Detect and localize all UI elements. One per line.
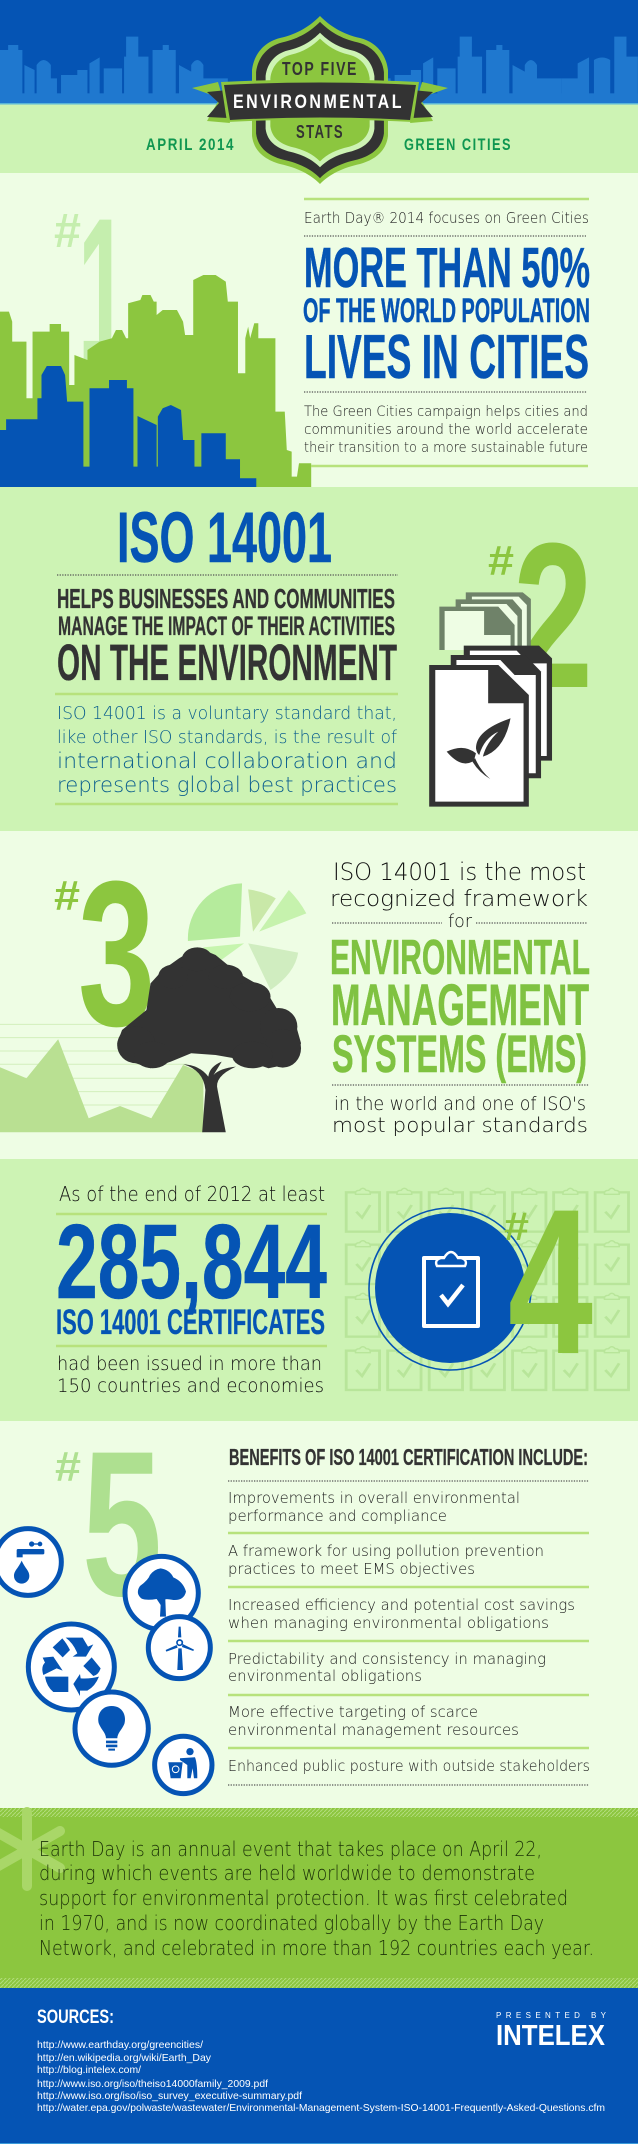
countries text: 150 countries and economies [57,1376,324,1397]
countries text: had been issued in more than [57,1354,322,1375]
panel: stat 4 [0,1159,638,1421]
icon: wind turbine [148,1617,210,1679]
benefits list: environmental obligations [228,1667,422,1685]
framework text: ISO 14001 is the most [333,858,586,886]
badge text: environmental: ENVIRONMENTAL [233,92,404,113]
date label: APRIL 2014 [146,135,235,154]
number 3 [54,838,155,1069]
earth day paragraph: during which events are held worldwide to demonstrate [39,1861,535,1885]
number 2 [488,500,593,731]
subheading: HELPS BUSINESSES AND COMMUNITIES [57,583,395,614]
iso paragraph [57,703,398,797]
subheading [57,583,397,691]
city skyline illustration [0,275,311,487]
framework text: for [448,911,473,932]
number 5: # [55,1443,81,1490]
number 3: # [54,872,80,919]
benefits list: practices to meet EMS objectives [228,1560,475,1578]
theme label: GREEN CITIES [404,135,512,154]
number 2: # [488,537,514,584]
iso paragraph: international collaboration and [57,749,397,773]
source list: http://www.iso.org/iso/theiso14000family_2009.pdf [37,2078,268,2090]
benefits list: when managing environmental obligations [228,1614,549,1632]
benefits list: Increased efficiency and potential cost savings [228,1596,575,1614]
benefits list: More effective targeting of scarce [228,1703,478,1721]
icon: person using bin [155,1736,212,1794]
benefits list: environmental management resources [228,1721,519,1739]
panel: stat 3 [0,831,638,1158]
icon: recycle [28,1624,114,1710]
earth day paragraph: support for environmental protection. It was first celebrated [39,1886,568,1910]
iso heading: ISO 14001 [117,499,332,578]
icon: tree [125,1556,198,1630]
icon: light bulb [75,1692,148,1765]
panel: earth day note [0,1808,638,1988]
icon: water tap [0,1529,61,1595]
number 1 [54,175,128,406]
chart lines and mountains [0,1024,203,1132]
earth day paragraph: Earth Day is an annual event that takes place on April 22, [39,1837,542,1861]
pie chart [188,883,306,990]
panel: stat 1: 1 [78,175,128,406]
earth day paragraph [39,1837,594,1960]
benefits list [228,1489,590,1775]
number 4: 4 [508,1166,593,1397]
benefits list: performance and compliance [228,1507,447,1525]
countries text [57,1354,324,1397]
campaign paragraph: The Green Cities campaign helps cities and [304,404,588,420]
source list: http://www.earthday.org/greencities/ [37,2039,203,2051]
certificates label: ISO 14001 CERTIFICATES [56,1303,325,1342]
popularity text: in the world and one of ISO's [334,1093,586,1115]
benefits list: Enhanced public posture with outside stakeholders [228,1757,590,1775]
framework text [330,858,588,932]
popularity text: most popular standards [332,1113,588,1137]
icon: stacked documents with leaf [429,592,552,807]
campaign paragraph [304,404,588,456]
subheading: ON THE ENVIRONMENT [57,634,397,691]
number 5 [55,1408,162,1639]
framework text: recognized framework [330,887,588,912]
earth day paragraph: in 1970, and is now coordinated globally by the Earth Day [39,1911,544,1935]
badge [192,16,448,184]
badge text: stats: STATS [296,122,344,142]
panel: stat 1 [0,173,638,487]
top rule [304,198,589,200]
source list: http://en.wikipedia.org/wiki/Earth_Day [37,2052,212,2064]
subheading: MANAGE THE IMPACT OF THEIR ACTIVITIES [58,611,395,641]
panel: footer sources [0,1988,638,2144]
icon: clipboard in circle [369,1208,531,1370]
iso paragraph: ISO 14001 is a voluntary standard that, [57,703,397,724]
shield [252,16,388,184]
presenter logo: INTELEX [496,2020,606,2052]
benefits list: A framework for using pollution prevention [228,1542,544,1560]
benefits list: Predictability and consistency in managing [228,1650,546,1668]
panel: stat 5 [0,1408,638,1808]
iso paragraph: like other ISO standards, is the result of [57,727,398,748]
certificate text: As of the end of 2012 at least [59,1182,325,1206]
source list: http://www.iso.org/iso/iso_survey_executive-summary.pdf [37,2090,302,2102]
campaign paragraph: communities around the world accelerate [304,422,588,438]
intro line: Earth Day® 2014 focuses on Green Cities [304,209,589,227]
source list: http://blog.intelex.com/ [37,2064,141,2076]
headline [303,236,590,392]
iso paragraph: represents global best practices [57,773,397,797]
icon: tree [117,947,301,1132]
benefits list: Improvements in overall environmental [228,1489,520,1507]
number 1: # [54,205,81,258]
presenter logo: PRESENTED BY [496,2011,607,2020]
city skyline: header left [0,37,244,104]
number 3: 3 [78,838,155,1069]
source list: http://water.epa.gov/polwaste/wastewater/Environmental-Management-System-ISO-14001-Frequently-Asked-Questions.cfm [37,2102,605,2114]
ribbon band [221,80,419,122]
popularity text [332,1093,588,1137]
ribbon tails [192,82,448,123]
number 4: # [504,1205,529,1249]
number 5: 5 [82,1408,162,1639]
sources heading: SOURCES: [37,2007,114,2028]
campaign paragraph: their transition to a more sustainable future [304,440,588,456]
icon: asterisk [0,1812,60,1886]
panel: header [0,0,638,184]
city skyline: header right [334,37,638,104]
clipboard pattern [346,1188,629,1390]
big number: 285,844 [56,1203,327,1321]
badge text: top five: TOP FIVE [282,59,358,79]
source list [37,2039,605,2114]
panel: stat 2 [0,487,638,831]
number 2: 2 [513,500,593,731]
ems heading [330,931,590,1084]
